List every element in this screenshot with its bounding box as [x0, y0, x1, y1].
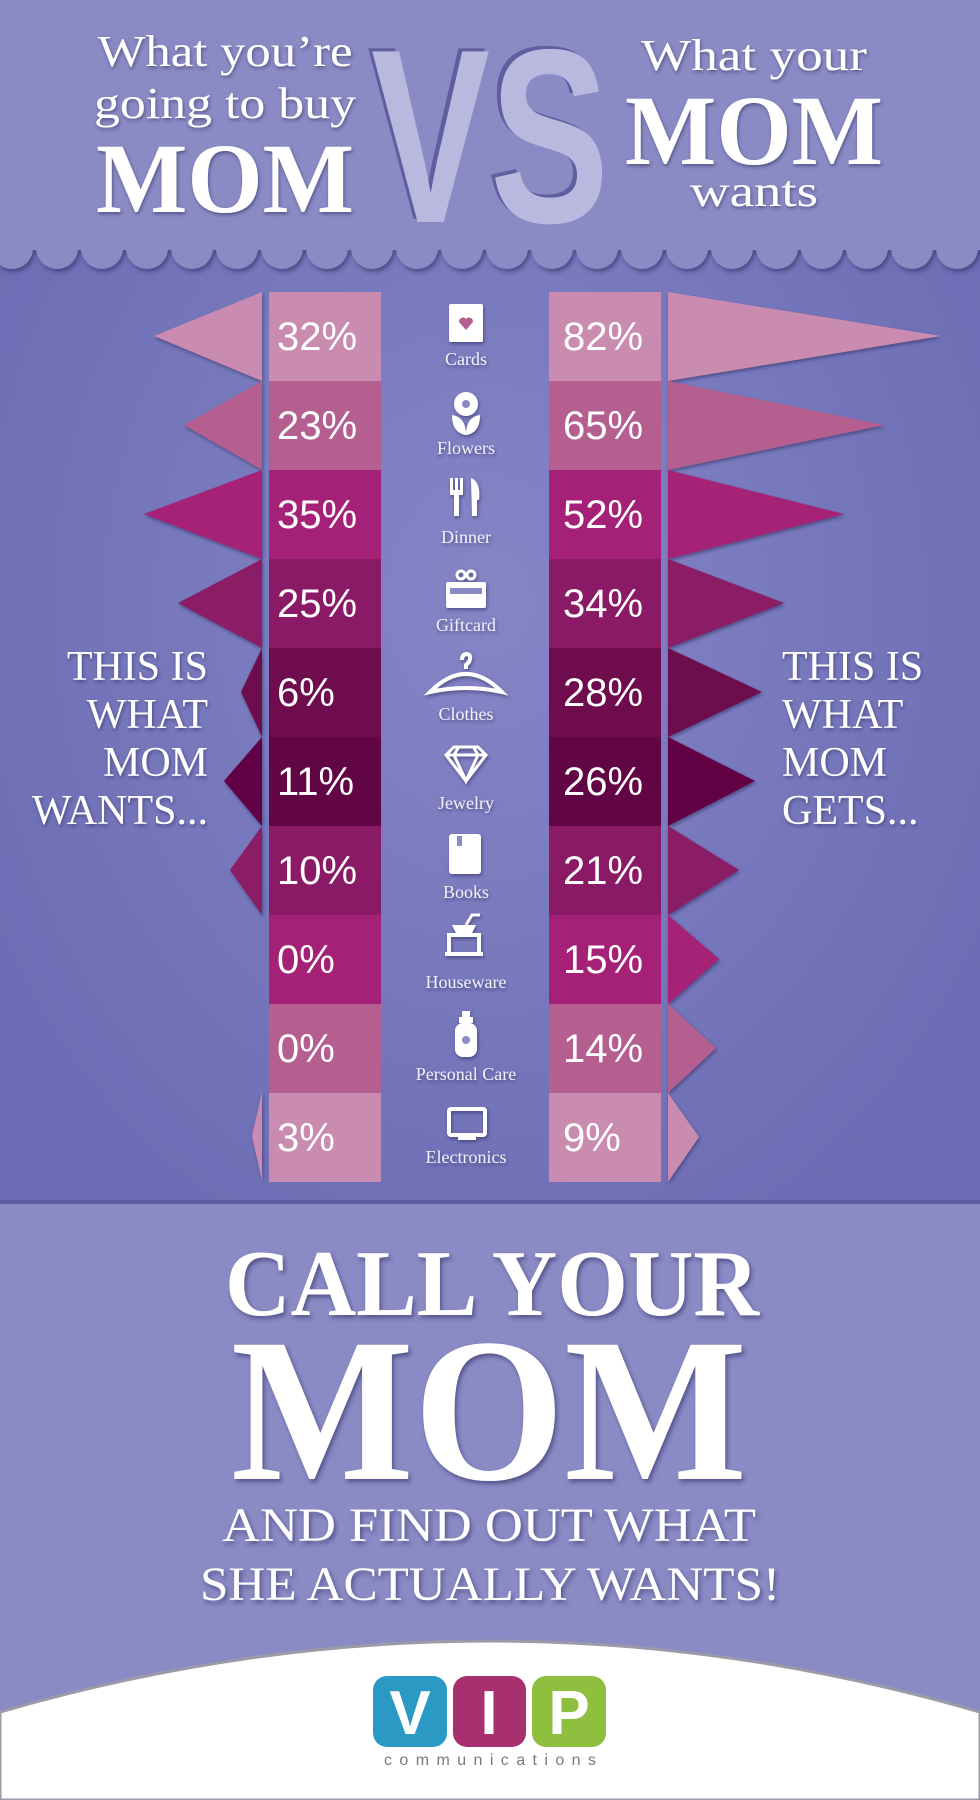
icon: hanger: Clothes: [438, 704, 494, 724]
white footer arc: [0, 1641, 980, 1800]
logo: VIP communications: P: [548, 1679, 590, 1748]
title left: [94, 27, 356, 234]
title right: What your: [641, 31, 867, 80]
title right: MOM: [625, 75, 883, 186]
left bar column: 11%: [277, 760, 354, 804]
logo: VIP communications: communications: [384, 1752, 596, 1769]
right bar column: 82%: [563, 315, 643, 359]
icon: fork and knife: [441, 478, 491, 547]
VS letters: VS: [371, 0, 609, 275]
icon: diamond: [438, 747, 494, 813]
icon: fork and knife: Dinner: [441, 527, 491, 547]
right bar column: 26%: [563, 760, 643, 804]
icon: monitor: [426, 1109, 506, 1167]
side label left: MOM: [103, 740, 208, 786]
right bar column: 15%: [563, 938, 643, 982]
left bar column: 10%: [277, 849, 357, 893]
right bar column: 28%: [563, 671, 643, 715]
icon: grinder: Houseware: [426, 972, 506, 992]
icon: grinder: [426, 915, 506, 992]
right bar column: [549, 292, 661, 1182]
right bar column: 9%: [563, 1116, 621, 1160]
logo: VIP communications: I: [480, 1679, 498, 1748]
side label right: THIS IS: [782, 644, 923, 690]
title right: wants: [690, 167, 818, 216]
call to action: SHE ACTUALLY WANTS!: [200, 1558, 780, 1611]
icon: book: [443, 834, 489, 902]
left bar column: 32%: [277, 315, 357, 359]
icon: flower: Flowers: [437, 438, 495, 458]
side label right: [782, 644, 923, 834]
chart: left flags (what mom wants): [144, 292, 262, 1181]
side label right: GETS...: [782, 788, 918, 834]
title left: going to buy: [94, 79, 356, 128]
icon: spray bottle: Personal Care: [416, 1064, 516, 1084]
right bar column: 65%: [563, 404, 643, 448]
category icons and labels: [416, 304, 516, 1167]
title left: MOM: [96, 123, 354, 234]
call to action: CALL YOUR: [225, 1232, 760, 1336]
icon: book: Books: [443, 882, 489, 902]
icon: diamond: Jewelry: [438, 793, 494, 813]
bottom section background: [0, 1203, 980, 1800]
left bar column: 23%: [277, 404, 357, 448]
left bar column: 3%: [277, 1116, 335, 1160]
title right: [625, 31, 883, 216]
side label right: MOM: [782, 740, 887, 786]
side label left: WHAT: [87, 692, 208, 738]
side label left: [32, 644, 208, 834]
left bar column: 0%: [277, 938, 335, 982]
left bar column: 35%: [277, 493, 357, 537]
right bar column: 14%: [563, 1027, 643, 1071]
logo: VIP communications: V: [389, 1679, 431, 1748]
left bar column: 25%: [277, 582, 357, 626]
icon: flower: [437, 392, 495, 458]
side label left: THIS IS: [67, 644, 208, 690]
title left: What you’re: [98, 27, 352, 76]
call to action: MOM: [231, 1297, 747, 1524]
call to action: [200, 1232, 780, 1611]
icon: card: [445, 304, 487, 369]
left bar column: 6%: [277, 671, 335, 715]
header band with scallop: [0, 0, 980, 269]
VS letters: VS: [367, 0, 605, 272]
icon: monitor: Electronics: [426, 1147, 506, 1167]
right bar column: 21%: [563, 849, 643, 893]
icon: card: Cards: [445, 349, 487, 369]
side label right: WHAT: [782, 692, 903, 738]
call to action: AND FIND OUT WHAT: [222, 1499, 756, 1552]
left bar column: [269, 292, 381, 1182]
main background: [0, 0, 980, 1205]
logo: VIP communications: [373, 1676, 606, 1769]
icon: giftcard: [436, 571, 496, 635]
icon: giftcard: Giftcard: [436, 615, 496, 635]
right bar column: 34%: [563, 582, 643, 626]
side label left: WANTS...: [32, 788, 208, 834]
icon: spray bottle: [416, 1011, 516, 1084]
icon: hanger: [430, 654, 502, 724]
chart: right flags (what mom gets): [668, 292, 941, 1182]
right bar column: 52%: [563, 493, 643, 537]
left bar column: 0%: [277, 1027, 335, 1071]
